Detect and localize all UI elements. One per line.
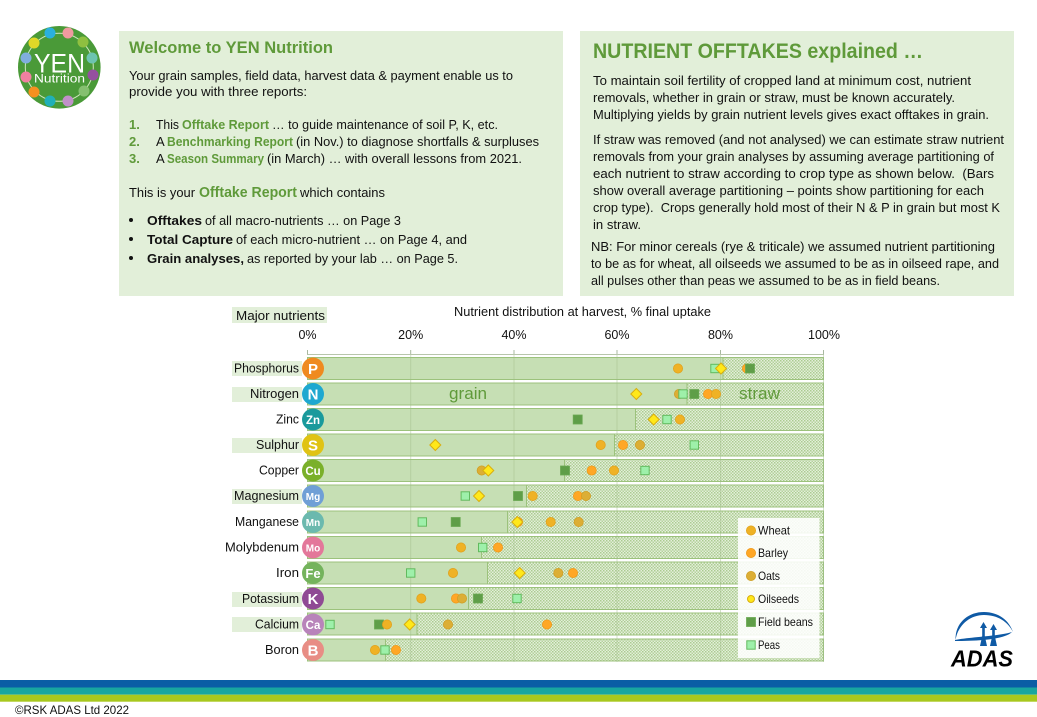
row: Boron: [265, 639, 401, 661]
text block: offtake report line: Offtake Report: [199, 185, 297, 201]
legend: crop types: Barley: [758, 546, 788, 560]
legend: crop types: Field beans: [758, 615, 813, 629]
text block: intro: Your grain samples, field data, harvest data & payment enable us to: [129, 68, 513, 83]
text block: paragraph 1: Multiplying yields by grain nutrient levels gives exact offtakes in grain.: [593, 107, 989, 122]
numbered list: three reports: A: [156, 134, 165, 149]
text block: paragraph 1: [593, 73, 989, 122]
row: Zinc: Zinc: [276, 412, 299, 426]
bullet list: contents: Grain analyses,: [147, 251, 244, 266]
footer colour bands: [0, 680, 1037, 702]
text block: intro: provide you with three reports:: [129, 84, 307, 99]
label: straw: straw: [739, 384, 781, 403]
row: Nitrogen: Nitrogen: [250, 387, 299, 401]
numbered list: three reports: 1.: [129, 117, 140, 132]
row: Calcium: Calcium: [255, 618, 299, 632]
x axis: 20%: [398, 328, 423, 342]
chart title: Nutrient distribution at harvest, % final uptake: [454, 304, 711, 319]
text block: offtake report line: which contains: [299, 185, 385, 200]
x axis: 80%: [708, 328, 733, 342]
numbered list: three reports: 3.: [129, 151, 140, 166]
row: Sulphur: S: [308, 438, 318, 454]
numbered list: three reports: A: [156, 151, 165, 166]
bullet list: contents: as reported by your lab … on Page 5.: [247, 251, 458, 266]
bullet list: contents: of all macro-nutrients … on Page 3: [205, 213, 401, 228]
copyright: ©RSK ADAS Ltd 2022: [15, 703, 129, 717]
bullet list: contents: Offtakes: [147, 213, 202, 228]
numbered list: three reports: Season Summary: [167, 151, 265, 166]
text block: paragraph 2: in straw.: [593, 217, 641, 232]
row: Iron: Iron: [276, 566, 299, 580]
row: Molybdenum: [225, 536, 503, 558]
x axis: 0%: [298, 328, 317, 342]
row: Magnesium: Magnesium: [234, 489, 299, 503]
legend: crop types: Peas: [758, 638, 780, 652]
x axis: 100%: [808, 328, 840, 342]
row: Phosphorus: [234, 358, 754, 380]
text block: offtake report line: [129, 185, 385, 201]
text block: paragraph 2: If straw was removed (and not analysed) we can estimate straw nutrient: [593, 132, 1004, 147]
row: Copper: Cu: [305, 466, 321, 478]
text block: paragraph 2: each nutrient to straw according to crop type as shown below. (Bars: [593, 166, 995, 181]
row: Manganese: [235, 511, 583, 533]
row: Magnesium: Mg: [306, 492, 320, 503]
panel: nutrient offtakes explained: [580, 31, 1014, 296]
row: Boron: Boron: [265, 643, 299, 657]
row: Manganese: Manganese: [235, 515, 299, 529]
key: major nutrients: Major nutrients: [236, 308, 326, 323]
text block: paragraph 1: To maintain soil fertility of cropped land at minimum cost, nutrient: [593, 73, 971, 88]
heading: nutrient offtakes: NUTRIENT OFFTAKES explained …: [593, 39, 923, 63]
row: Sulphur: Sulphur: [256, 438, 299, 452]
row: Potassium: Potassium: [242, 592, 299, 606]
numbered list: three reports: Offtake Report: [182, 117, 270, 132]
logo: YEN Nutrition: [18, 26, 101, 109]
x axis: 60%: [604, 328, 630, 342]
legend: crop types: Oilseeds: [758, 592, 799, 606]
legend: crop types: Wheat: [758, 524, 791, 538]
text block: paragraph 2: removals from your grain analyses by assuming average partitioning of: [593, 149, 994, 164]
text block: NB note: to be as for wheat, all oilseeds we assumed to be as in oilseed rape, and: [591, 256, 999, 271]
row: Phosphorus: P: [308, 361, 318, 378]
text block: paragraph 2: [593, 132, 1004, 232]
row: Potassium: K: [308, 591, 319, 608]
logo: YEN Nutrition: YEN: [34, 48, 85, 78]
legend: crop types: Oats: [758, 569, 780, 583]
logo: YEN Nutrition: Nutrition: [34, 74, 85, 86]
row: Potassium: [242, 588, 521, 610]
label bands: major nutrients: [232, 361, 302, 632]
text block: paragraph 1: removals, whether in grain or straw, must be known accurately.: [593, 90, 955, 105]
logo: ADAS: [950, 612, 1014, 672]
text block: paragraph 2: crop type). Crops generally hold most of their N & P in grain but most K: [593, 200, 1000, 215]
text block: paragraph 2: show overall average partitioning – points show partitioning for each: [593, 183, 984, 198]
row: Molybdenum: Mo: [306, 544, 320, 554]
label: grain: grain: [449, 384, 487, 403]
text block: NB note: [591, 239, 999, 288]
row: Boron: B: [308, 642, 319, 660]
numbered list: three reports: [129, 117, 539, 166]
row: Zinc: Zn: [306, 415, 320, 427]
row: Calcium: [255, 614, 552, 636]
row: Iron: [276, 562, 578, 584]
bullet list: contents: [129, 213, 467, 266]
row: Nitrogen: N: [308, 386, 318, 404]
row: Copper: [259, 460, 649, 482]
row: Zinc: [276, 408, 685, 430]
panel: welcome: [119, 31, 563, 296]
numbered list: three reports: 2.: [129, 134, 140, 149]
numbered list: three reports: This: [156, 117, 179, 132]
row: Phosphorus: Phosphorus: [234, 362, 299, 376]
row: Copper: Copper: [259, 464, 299, 478]
row: Manganese: Mn: [306, 518, 320, 529]
legend: crop types: [738, 518, 820, 658]
row: Molybdenum: Molybdenum: [225, 540, 299, 554]
x axis: [298, 328, 840, 355]
logo: ADAS: ADAS: [950, 646, 1014, 672]
x axis: 40%: [501, 328, 527, 342]
numbered list: three reports: (in Nov.) to diagnose shortfalls & surpluses: [296, 134, 539, 149]
row: Magnesium: [234, 485, 591, 507]
row: Iron: Fe: [305, 566, 321, 581]
bullet list: contents: Total Capture: [147, 232, 233, 247]
numbered list: three reports: (in March) … with overall lessons from 2021.: [267, 151, 522, 166]
chart: nutrient distribution: [225, 304, 840, 662]
numbered list: three reports: … to guide maintenance of soil P, K, etc.: [272, 117, 498, 132]
text block: offtake report line: This is your: [129, 185, 196, 200]
text block: NB note: all pulses other than peas we assumed to be as in field beans.: [591, 273, 940, 288]
heading: welcome: Welcome to YEN Nutrition: [129, 38, 333, 57]
bullet list: contents: of each micro-nutrient … on Page 4, and: [236, 232, 467, 247]
row: Nitrogen: [250, 383, 721, 405]
row: Calcium: Ca: [306, 620, 321, 632]
bars: grain and straw partitioning: [308, 358, 824, 661]
text block: NB note: NB: For minor cereals (rye & triticale) we assumed nutrient partitioning: [591, 239, 995, 254]
row: Sulphur: [256, 434, 698, 456]
text block: intro: [129, 68, 513, 99]
numbered list: three reports: Benchmarking Report: [167, 134, 294, 149]
